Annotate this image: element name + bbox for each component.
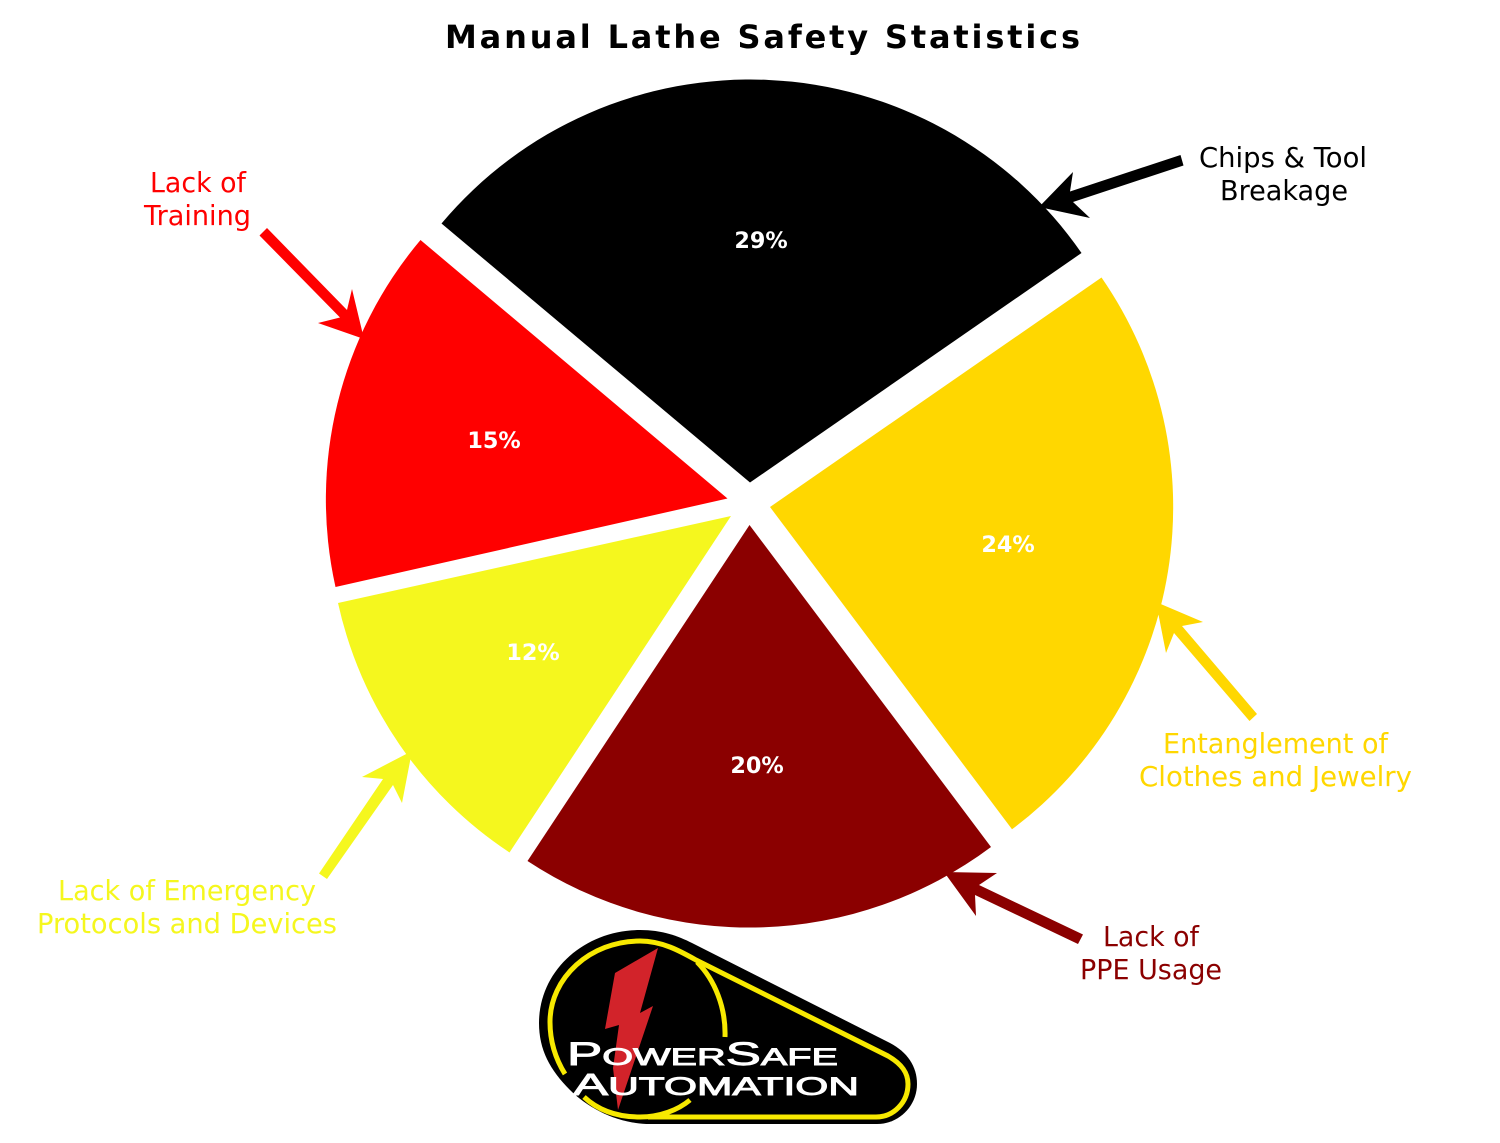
label: lack of emergency protocols: Protocols and Devices	[37, 907, 337, 940]
label: lack of PPE usage: PPE Usage	[1080, 953, 1222, 986]
label: chips and tool breakage: Chips & Tool	[1199, 141, 1367, 174]
logo wordmark: A UTOMATION	[573, 1067, 859, 1102]
percentage: 12%: 12%	[506, 640, 560, 666]
logo: PowerSafe Automation	[539, 930, 917, 1124]
logo yellow belt	[550, 941, 908, 1117]
label: lack of training: Training	[143, 199, 251, 232]
percentage: 15%: 15%	[467, 428, 521, 454]
label: lack of training: Lack of	[150, 166, 247, 199]
arrow: lack of emergency protocols	[319, 751, 412, 879]
pie chart	[326, 80, 1173, 928]
label: chips and tool breakage: Breakage	[1220, 174, 1348, 207]
label: lack of PPE usage	[1080, 920, 1222, 986]
arrow: lack of PPE usage	[944, 872, 1083, 944]
logo wordmark: P OWER S AFE	[567, 1036, 838, 1072]
label: entanglement: Clothes and Jewelry	[1139, 760, 1412, 793]
title: Manual Lathe Safety Statistics	[445, 18, 1080, 56]
percentage: 24%: 24%	[981, 532, 1035, 558]
logo wordmark	[567, 1036, 859, 1102]
wedge: lack of PPE usage 20%	[528, 525, 991, 928]
label: lack of training	[143, 166, 251, 232]
label: lack of PPE usage: Lack of	[1103, 920, 1200, 953]
arrow: chips and tool breakage	[1039, 155, 1184, 218]
wedge: lack of emergency protocols 12%	[338, 516, 731, 852]
wedge: entanglement 24%	[770, 278, 1173, 829]
label: entanglement	[1139, 727, 1412, 793]
label: lack of emergency protocols: Lack of Emergency	[58, 874, 316, 907]
wedge: lack of training 15%	[326, 240, 728, 587]
label: entanglement: Entanglement of	[1163, 727, 1389, 760]
logo badge	[539, 930, 917, 1124]
label: lack of emergency protocols	[37, 874, 337, 940]
wedge: chips and tool breakage 29%	[442, 80, 1082, 483]
arrow: entanglement	[1156, 602, 1257, 721]
percentage: 20%: 20%	[730, 753, 784, 779]
logo lightning bolt	[605, 948, 658, 1110]
percentage: 29%: 29%	[734, 228, 788, 254]
label: chips and tool breakage	[1199, 141, 1367, 207]
arrow: lack of training	[260, 228, 364, 339]
